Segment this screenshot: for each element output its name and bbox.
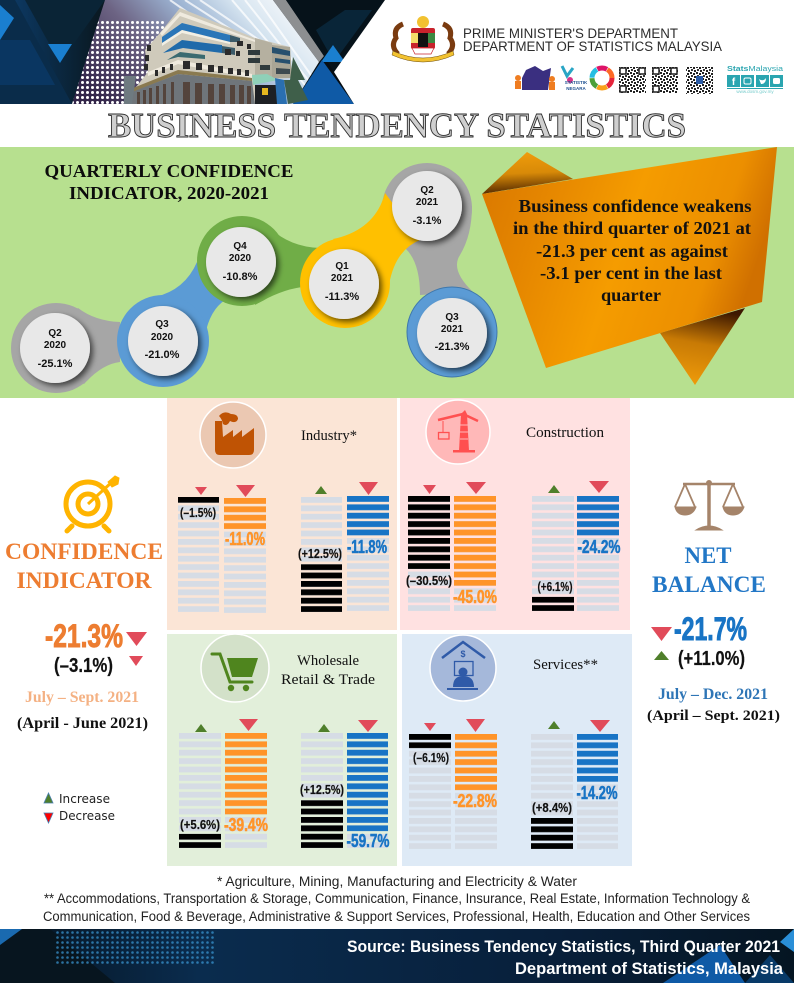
net balance previous value — [654, 648, 745, 670]
left column: confidence indicator — [5, 476, 163, 823]
callout: business confidence: in the third quarter of 2021 at — [513, 218, 751, 238]
right column: net balance — [647, 480, 780, 724]
panel title: wholesale — [281, 653, 375, 688]
timeline node: Q2 2021: -3.1% — [413, 215, 442, 227]
timeline node: Q3 2020: 2020 — [151, 332, 174, 343]
source text: Source: Business Tendency Statistics, Third Quarter 2021 — [347, 938, 780, 956]
chart heading — [44, 161, 294, 203]
timeline node: Q3 2021 — [417, 298, 487, 368]
timeline node: Q3 2021: 2021 — [441, 324, 464, 335]
icon: services — [430, 635, 496, 701]
net balance bar: services previous: (+8.4%) — [532, 801, 572, 815]
icon: QR code 2 — [652, 67, 678, 93]
icon: factory — [200, 402, 266, 468]
title: BUSINESS TENDENCY STATISTICS — [108, 106, 686, 145]
header banner — [0, 0, 400, 104]
timeline node: Q1 2021: 2021 — [331, 273, 354, 284]
legend: Decrease — [59, 809, 115, 823]
confidence bar: wholesale previous: (+5.6%) — [180, 818, 220, 832]
confidence heading — [5, 539, 163, 594]
footer band — [0, 929, 794, 983]
icon: shopping cart — [201, 634, 269, 702]
confidence bar: construction current: -45.0% — [453, 587, 497, 607]
icon: census logo — [515, 66, 555, 90]
net balance heading — [652, 543, 766, 598]
ground floor panels — [137, 82, 251, 104]
confidence bar: wholesale current — [224, 719, 268, 848]
net balance heading: BALANCE — [652, 572, 766, 598]
timeline node: Q4 2020: 2020 — [229, 253, 252, 264]
timeline node: Q2 2021: 2021 — [416, 197, 439, 208]
icon: statistics day logo: STATISTIK — [565, 80, 588, 85]
net balance bar: services previous — [531, 721, 573, 849]
panel title: industry: Industry* — [301, 428, 357, 444]
net balance bar: construction current — [577, 481, 620, 611]
department name — [463, 26, 722, 54]
timeline node: Q1 2021: Q1 — [335, 261, 349, 272]
panel title: construction: Construction — [526, 425, 605, 441]
icon: office building — [124, 8, 308, 104]
icon: SDG wheel — [592, 68, 612, 88]
callout: business confidence — [482, 147, 777, 385]
net balance bar: wholesale previous: (+12.5%) — [300, 783, 344, 797]
timeline node: Q2 2020: -25.1% — [38, 358, 73, 370]
confidence current bar: industry previous: (–1.5%) — [180, 506, 216, 520]
net balance bar: wholesale current — [346, 720, 390, 851]
callout: business confidence: -3.1 per cent in the last — [540, 263, 722, 283]
icon: target — [66, 476, 119, 531]
chart heading: INDICATOR, 2020-2021 — [69, 183, 269, 203]
footnotes — [43, 874, 750, 924]
timeline node: Q4 2020: -10.8% — [223, 271, 258, 283]
icon: scales — [675, 480, 744, 530]
net balance bar: wholesale previous — [300, 724, 344, 848]
net balance previous value: (+11.0%) — [678, 648, 745, 670]
net balance current value: -21.7% — [674, 611, 747, 647]
net balance heading: NET — [684, 543, 732, 569]
StatsMalaysia social block: Stats Malaysia — [727, 66, 783, 73]
confidence bar: services current: -22.8% — [453, 791, 497, 811]
confidence current value: -21.3% — [45, 618, 123, 654]
StatsMalaysia social block: www.dosm.gov.my — [736, 89, 774, 94]
confidence heading: INDICATOR — [16, 568, 153, 594]
confidence bar: construction previous: (–30.5%) — [406, 574, 452, 588]
timeline node: Q2 2020: 2020 — [44, 340, 67, 351]
confidence bar: construction previous — [406, 485, 452, 611]
panel: construction — [400, 398, 630, 630]
StatsMalaysia social block: f — [732, 77, 736, 88]
confidence period: July – Sept. 2021 — [25, 689, 139, 706]
confidence bar: wholesale previous — [179, 724, 221, 848]
icon: QR code 1 — [619, 67, 646, 93]
timeline node: Q3 2020: Q3 — [155, 319, 169, 330]
net balance bar: construction current: -24.2% — [578, 537, 620, 557]
confidence bar: services previous — [409, 723, 451, 849]
panel: wholesale retail and trade — [167, 634, 397, 866]
net balance bar: wholesale current: -59.7% — [346, 831, 390, 851]
panel title: services: Services** — [533, 657, 598, 673]
department name: PRIME MINISTER'S DEPARTMENT — [463, 26, 678, 41]
net balance bar: industry current: -11.8% — [347, 537, 387, 557]
net balance period: (April – Sept. 2021) — [647, 708, 780, 724]
building windows — [144, 41, 251, 76]
panel: industry — [167, 398, 397, 630]
net balance bar: industry previous — [298, 486, 342, 612]
timeline node: Q3 2020 — [128, 306, 198, 376]
panel title: wholesale: Wholesale — [297, 653, 359, 669]
net balance bar: industry current — [347, 482, 389, 611]
confidence bar: services previous: (–6.1%) — [413, 751, 449, 765]
footnotes: Communication, Food & Beverage, Administrative & Support Services, Professional, Health, Education and Other Services — [43, 909, 750, 924]
footnotes: * Agriculture, Mining, Manufacturing and Electricity & Water — [217, 874, 578, 889]
chart heading: QUARTERLY CONFIDENCE — [44, 161, 294, 181]
timeline node: Q4 2020 — [206, 227, 276, 297]
net balance bar: industry previous: (+12.5%) — [298, 547, 342, 561]
timeline node: Q3 2020: -21.0% — [145, 349, 180, 361]
StatsMalaysia social block — [727, 66, 783, 94]
icon: statistics day logo — [562, 66, 588, 91]
panel title: wholesale: Retail & Trade — [281, 672, 375, 688]
icon: statistics day logo: NEGARA — [566, 86, 586, 91]
confidence previous value: (–3.1%) — [54, 655, 113, 677]
timeline node: Q3 2021: -21.3% — [435, 341, 470, 353]
confidence period — [17, 689, 148, 732]
source text — [347, 938, 784, 978]
confidence current bar: industry previous — [178, 487, 219, 612]
legend — [44, 792, 115, 823]
timeline connected circles — [11, 163, 497, 393]
icon: QR code 3 — [686, 67, 713, 94]
callout: business confidence: -21.3 per cent as against — [536, 241, 728, 261]
net balance bar: construction previous — [532, 485, 574, 611]
timeline node: Q3 2021: Q3 — [445, 312, 459, 323]
timeline node: Q1 2021 — [309, 249, 379, 319]
department name: DEPARTMENT OF STATISTICS MALAYSIA — [463, 39, 722, 54]
icon: Malaysia coat of arms — [392, 16, 454, 62]
net balance bar: services current: -14.2% — [576, 783, 618, 803]
confidence bar: services current — [453, 719, 497, 849]
panel: services — [402, 634, 632, 866]
timeline node: Q2 2021 — [392, 171, 462, 241]
confidence bar: industry current: -11.0% — [225, 529, 265, 549]
timeline node: Q2 2020 — [20, 313, 90, 383]
timeline node: Q2 2020: Q2 — [48, 328, 62, 339]
timeline node: Q1 2021: -11.3% — [325, 291, 359, 303]
net balance period: July – Dec. 2021 — [658, 686, 768, 703]
net balance bar: construction previous: (+6.1%) — [538, 580, 572, 594]
net balance period — [647, 686, 780, 724]
icon: services: $ — [460, 649, 466, 659]
confidence heading: CONFIDENCE — [5, 539, 163, 565]
net balance current value — [651, 611, 747, 647]
callout: business confidence: quarter — [601, 285, 661, 305]
callout: business confidence: Business confidence weakens — [518, 196, 752, 216]
legend: Increase — [59, 792, 110, 806]
confidence bar: construction current — [453, 482, 497, 611]
confidence bar: industry current — [224, 485, 266, 613]
footnotes: ** Accommodations, Transportation & Storage, Communication, Finance, Insurance, Real Estate, Information Technology & — [44, 891, 750, 906]
net balance bar: services current — [576, 720, 618, 849]
confidence period: (April - June 2021) — [17, 715, 148, 732]
timeline node: Q4 2020: Q4 — [233, 241, 247, 252]
panel: quarterly confidence indicator band — [0, 147, 794, 398]
source text: Department of Statistics, Malaysia — [515, 960, 784, 978]
icon: crane — [426, 400, 490, 464]
timeline node: Q2 2021: Q2 — [420, 185, 434, 196]
confidence bar: wholesale current: -39.4% — [224, 815, 268, 835]
